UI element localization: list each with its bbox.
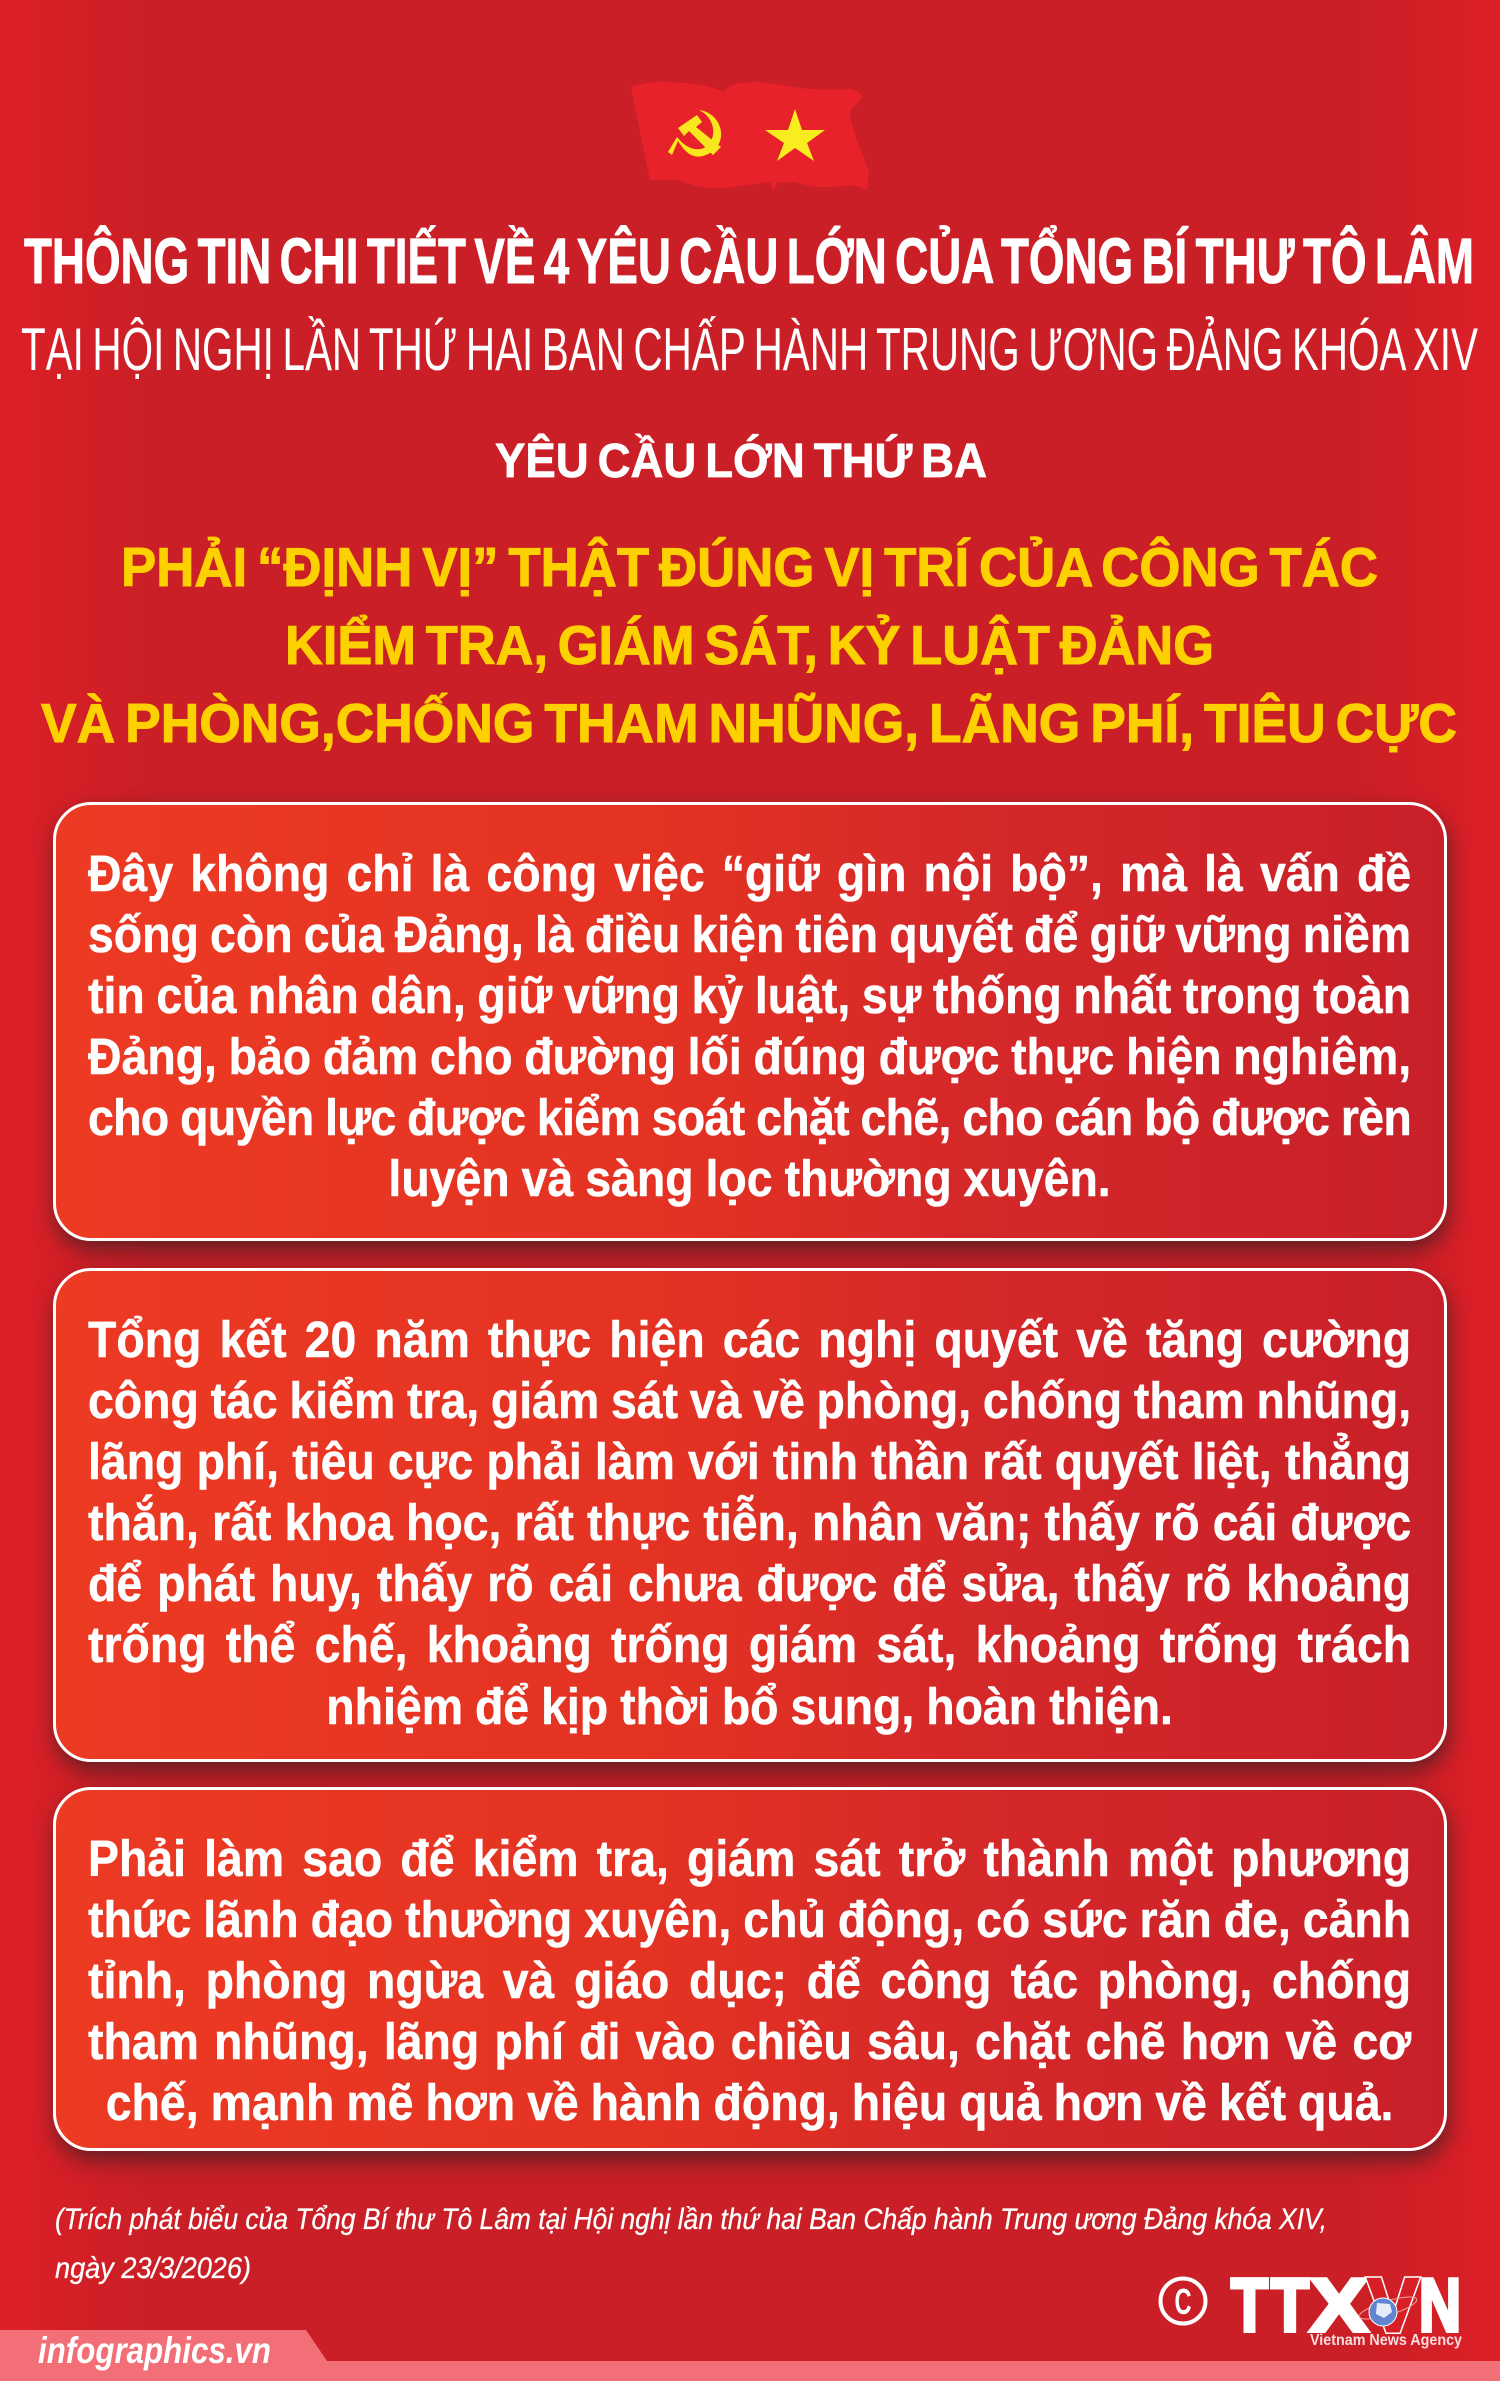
text block: third paragraph: Phải làm sao để kiểm tra, giám sát trở thành một phương: [88, 1830, 1411, 1887]
source note: [55, 2203, 1327, 2285]
source note: ngày 23/3/2026): [55, 2252, 251, 2285]
source note: (Trích phát biểu của Tổng Bí thư Tô Lâm tại Hội nghị lần thứ hai Ban Chấp hành Trung ương Đảng khóa XIV,: [55, 2203, 1327, 2236]
text block: second paragraph: lãng phí, tiêu cực phải làm với tinh thần rất quyết liệt, thẳng: [88, 1433, 1411, 1490]
logo: TTXVN Vietnam News Agency: X: [1310, 2263, 1368, 2347]
text block: third paragraph: [88, 1830, 1412, 2131]
text block: first paragraph: tin của nhân dân, giữ vững kỷ luật, sự thống nhất trong toàn: [88, 967, 1411, 1024]
logo: TTXVN Vietnam News Agency: [1231, 2263, 1462, 2349]
text block: third paragraph: tỉnh, phòng ngừa và giáo dục; để công tác phòng, chống: [88, 1952, 1411, 2009]
logo: TTXVN Vietnam News Agency: Vietnam News Agency: [1310, 2332, 1462, 2349]
icon: globe: [1357, 2293, 1419, 2326]
text block: first paragraph: Đây không chỉ là công việc “giữ gìn nội bộ”, mà là vấn đề: [88, 845, 1411, 902]
panel: third paragraph background: [53, 1787, 1447, 2151]
text block: second paragraph: Tổng kết 20 năm thực hiện các nghị quyết về tăng cường: [88, 1311, 1411, 1368]
yellow heading: KIỂM TRA, GIÁM SÁT, KỶ LUẬT ĐẢNG: [285, 614, 1214, 676]
icon: copyright symbol: C: [1174, 2281, 1192, 2322]
logo letter V: V: [1368, 2263, 1418, 2347]
text block: second paragraph: nhiệm để kịp thời bổ sung, hoàn thiện.: [326, 1678, 1173, 1735]
icon: gold star: [765, 109, 825, 161]
text block: first paragraph: [88, 845, 1411, 1207]
text block: second paragraph: để phát huy, thấy rõ cái chưa được để sửa, thấy rõ khoảng: [88, 1555, 1411, 1612]
text block: third paragraph: tham nhũng, lãng phí đi vào chiều sâu, chặt chẽ hơn về cơ: [88, 2013, 1411, 2070]
header: flag and titles: [21, 82, 1478, 754]
icon: hammer and sickle: [668, 110, 721, 157]
yellow heading: PHẢI “ĐỊNH VỊ” THẬT ĐÚNG VỊ TRÍ CỦA CÔNG TÁC: [121, 536, 1378, 598]
text block: second paragraph: công tác kiểm tra, giám sát và về phòng, chống tham nhũng,: [88, 1372, 1411, 1429]
logo: TTXVN Vietnam News Agency: T: [1271, 2263, 1309, 2347]
text block: first paragraph: Đảng, bảo đảm cho đường lối đúng được thực hiện nghiêm,: [88, 1028, 1411, 1085]
logo: TTXVN Vietnam News Agency: T: [1231, 2263, 1268, 2347]
text block: third paragraph: chế, mạnh mẽ hơn về hành động, hiệu quả hơn về kết quả.: [106, 2074, 1393, 2131]
icon: party and national flag: [631, 82, 869, 191]
text block: third paragraph: thức lãnh đạo thường xuyên, chủ động, có sức răn đe, cảnh: [88, 1891, 1411, 1948]
text block: second paragraph: trống thể chế, khoảng trống giám sát, khoảng trống trách: [88, 1616, 1411, 1673]
yellow heading: VÀ PHÒNG,CHỐNG THAM NHŨNG, LÃNG PHÍ, TIÊU CỰC: [41, 692, 1457, 754]
panel: second paragraph background: [53, 1268, 1447, 1762]
subtitle: YÊU CẦU LỚN THỨ BA: [495, 433, 987, 488]
text block: second paragraph: [88, 1311, 1411, 1735]
logo letter V: V: [1368, 2263, 1418, 2347]
text block: first paragraph: cho quyền lực được kiểm soát chặt chẽ, cho cán bộ được rèn: [88, 1089, 1411, 1146]
yellow heading: [41, 536, 1457, 754]
text block: first paragraph: luyện và sàng lọc thường xuyên.: [388, 1150, 1111, 1207]
logo: TTXVN Vietnam News Agency: N: [1419, 2263, 1461, 2347]
brand tab and bottom band: [0, 2330, 1500, 2381]
footer: source, logo and brand: [0, 2203, 1500, 2381]
panel: first paragraph background: [53, 802, 1447, 1241]
text block: first paragraph: sống còn của Đảng, là điều kiện tiên quyết để giữ vững niềm: [88, 906, 1411, 963]
icon: copyright symbol: [1160, 2278, 1206, 2324]
brand label: infographics.vn: [38, 2330, 271, 2371]
text block: second paragraph: thắn, rất khoa học, rất thực tiễn, nhân văn; thấy rõ cái được: [88, 1494, 1411, 1551]
